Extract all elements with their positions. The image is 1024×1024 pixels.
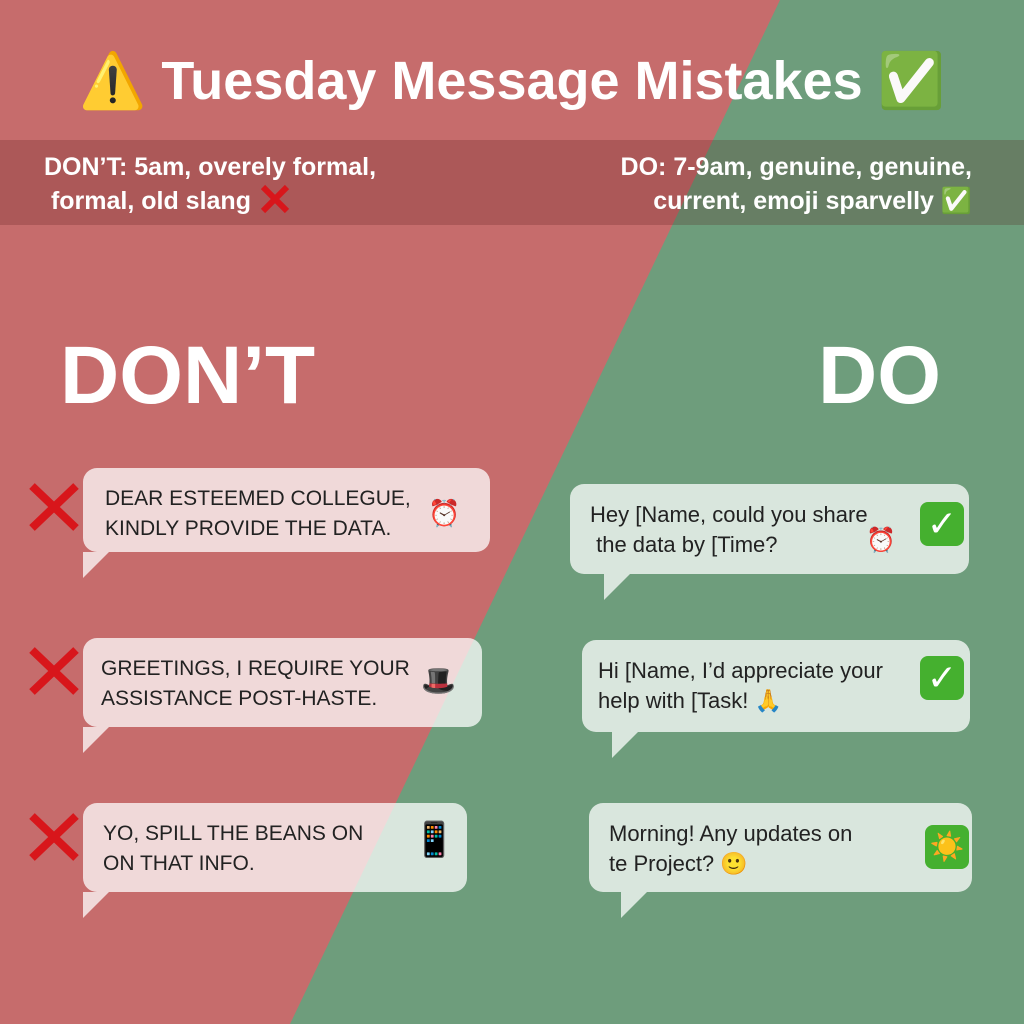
bubble: do 2: help with [Task! 🙏 <box>598 688 782 713</box>
icon: cross 3 <box>29 813 79 861</box>
subtitle: don't summary: DON’T: 5am, overely formal, <box>44 153 376 181</box>
subtitle: don't summary: formal, old slang <box>51 187 251 215</box>
bubble: do 1: Hey [Name, could you share <box>590 502 868 527</box>
bubble: do 3: Morning! Any updates on <box>609 821 852 846</box>
bubble: don't 2: ASSISTANCE POST-HASTE. <box>101 687 377 710</box>
bubble: don't 1: ⏰ <box>428 498 460 528</box>
subtitle: do summary: DO: 7-9am, genuine, genuine, <box>621 153 972 181</box>
bubble: do 3: ☀️ <box>930 831 964 862</box>
bubble: don't 1: DEAR ESTEEMED COLLEGUE, <box>105 487 411 510</box>
bubble: do 3 <box>589 803 972 892</box>
bubble: do 2: ✓ <box>927 657 957 698</box>
bubble: don't 3: ON THAT INFO. <box>103 852 255 875</box>
bubble: do 1: ⏰ <box>866 527 896 554</box>
bubble: do 2 <box>582 640 970 732</box>
bubble: do 1: ✓ <box>927 503 957 544</box>
subtitle: do summary <box>621 153 972 215</box>
bubble: don't 1: KINDLY PROVIDE THE DATA. <box>105 517 391 540</box>
bubble: don't 1 <box>83 468 490 552</box>
heading: DON'T: DON’T <box>60 330 315 421</box>
bubble: do 1: the data by [Time? <box>596 532 778 557</box>
heading: DO: DO <box>818 330 941 421</box>
bubble: do 2: Hi [Name, I’d appreciate your <box>598 658 883 683</box>
bubble: don't 2: GREETINGS, I REQUIRE YOUR <box>101 657 410 680</box>
bubble: don't 2 <box>83 638 482 727</box>
icon: cross 1 <box>29 483 79 531</box>
bubble: don't 3: 📱 <box>413 821 455 859</box>
icon: cross 2 <box>29 647 79 695</box>
bubble: don't 3: YO, SPILL THE BEANS ON <box>103 822 363 845</box>
title: ⚠️ Tuesday Message Mistakes ✅ <box>79 51 945 111</box>
subtitle: don't summary <box>44 153 376 215</box>
bubble: do 1 <box>570 484 969 574</box>
bubble: don't 3 <box>83 803 467 892</box>
subtitle: do summary: current, emoji sparvelly ✅ <box>653 187 972 215</box>
bubble: do 3: te Project? 🙂 <box>609 851 748 876</box>
bubble: don't 2: 🎩 <box>421 665 456 696</box>
